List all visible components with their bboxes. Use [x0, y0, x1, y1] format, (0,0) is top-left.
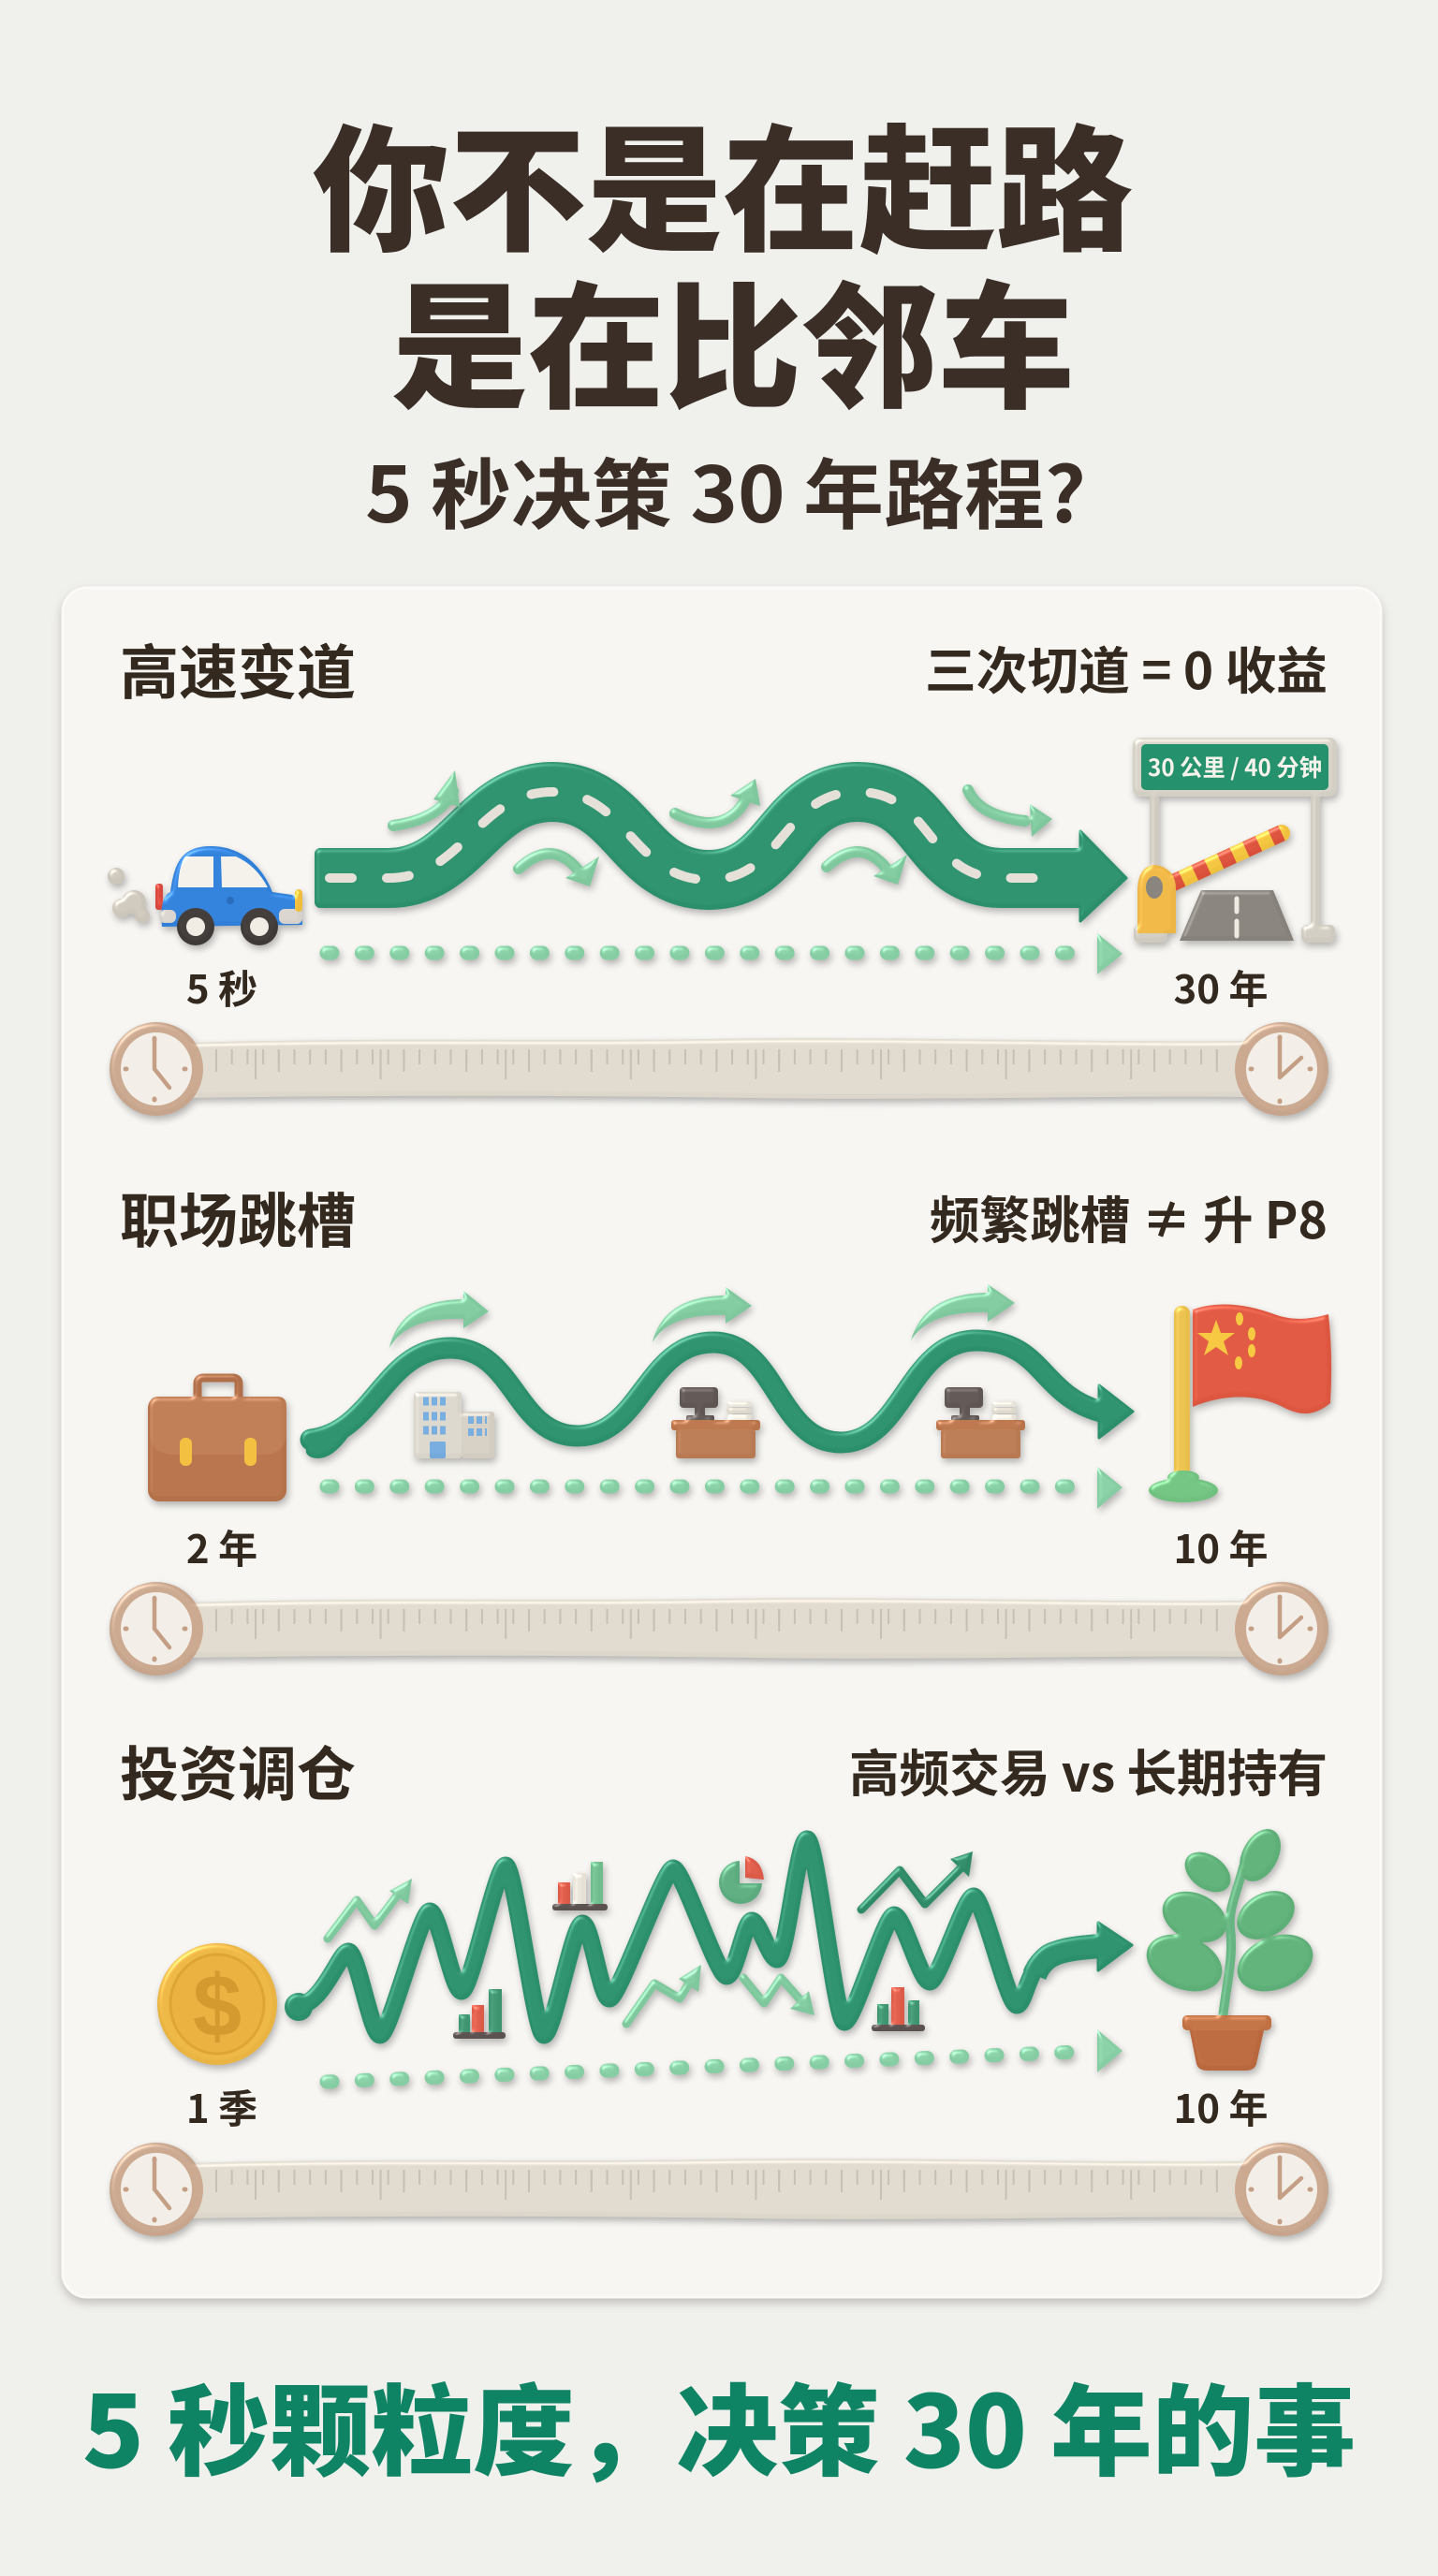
title: 是在比邻车	[391, 240, 1075, 437]
arrows: three hop arrows	[389, 1284, 1015, 1348]
heading: job hopping: 职场跳槽	[120, 1175, 356, 1260]
label: start: 5 秒	[186, 959, 257, 1016]
icon: bar chart one	[453, 1989, 506, 2039]
label: end: 10 年	[1173, 2078, 1269, 2135]
panel: main card	[63, 588, 1381, 2297]
title	[313, 82, 1133, 437]
arrow: volatile zigzag line	[285, 1839, 1132, 2035]
conclusion headline: 5 秒颗粒度，决策 30 年的事	[82, 2352, 1356, 2496]
arrow: dotted direct path	[327, 1467, 1123, 1509]
label: end: 30 年	[1173, 959, 1269, 1016]
timeline ruler	[110, 1022, 1328, 1116]
icon: car with smoke	[108, 846, 302, 945]
text on toll sign: 30 公里 / 40 分钟	[1148, 750, 1322, 783]
icon: toll gate and sign	[1133, 738, 1337, 943]
label: end: 10 年	[1173, 1518, 1269, 1575]
icon: bar chart three	[872, 1987, 925, 2031]
note: three lane changes: 三次切道 = 0 收益	[925, 630, 1328, 704]
icon: briefcase	[148, 1378, 286, 1501]
icon: potted plant	[1138, 1822, 1321, 2071]
arrows: small trend arrows	[328, 1852, 973, 2024]
icon: bar chart two	[552, 1862, 608, 1910]
note: frequent job hopping: 频繁跳槽 ≠ 升 P8	[930, 1179, 1328, 1253]
arrows: light green lane change arrows	[393, 770, 1052, 886]
heading: investing: 投资调仓	[120, 1728, 356, 1813]
icon: dollar coin	[157, 1943, 277, 2065]
panel: investing	[110, 1728, 1328, 2236]
title: 你不是在赶路	[313, 82, 1133, 280]
arrow: wavy career path	[306, 1340, 1133, 1458]
label: start: 1 季	[186, 2078, 257, 2135]
label: start: 2 年	[186, 1518, 257, 1575]
panel: highway lane change	[108, 626, 1337, 1116]
note: high frequency vs long term: 高频交易 vs 长期持有	[849, 1733, 1328, 1807]
arrow: dotted direct path	[327, 933, 1123, 974]
icon: dollar coin: $	[193, 1956, 242, 2055]
panel: job hopping	[110, 1175, 1331, 1676]
icon: pie chart	[719, 1856, 764, 1904]
subtitle: 5 秒决策 30 年路程?	[365, 433, 1086, 545]
icon: red flag	[1149, 1304, 1331, 1502]
icon: desk one	[671, 1387, 760, 1458]
timeline ruler	[110, 2143, 1328, 2236]
heading: highway: 高速变道	[120, 626, 356, 711]
timeline ruler	[110, 1582, 1328, 1676]
arrow: dotted gently rising path	[327, 2029, 1123, 2082]
icon: desk two	[936, 1387, 1025, 1458]
arrow: winding highway road	[315, 792, 1126, 921]
icon: office buildings	[414, 1392, 494, 1458]
